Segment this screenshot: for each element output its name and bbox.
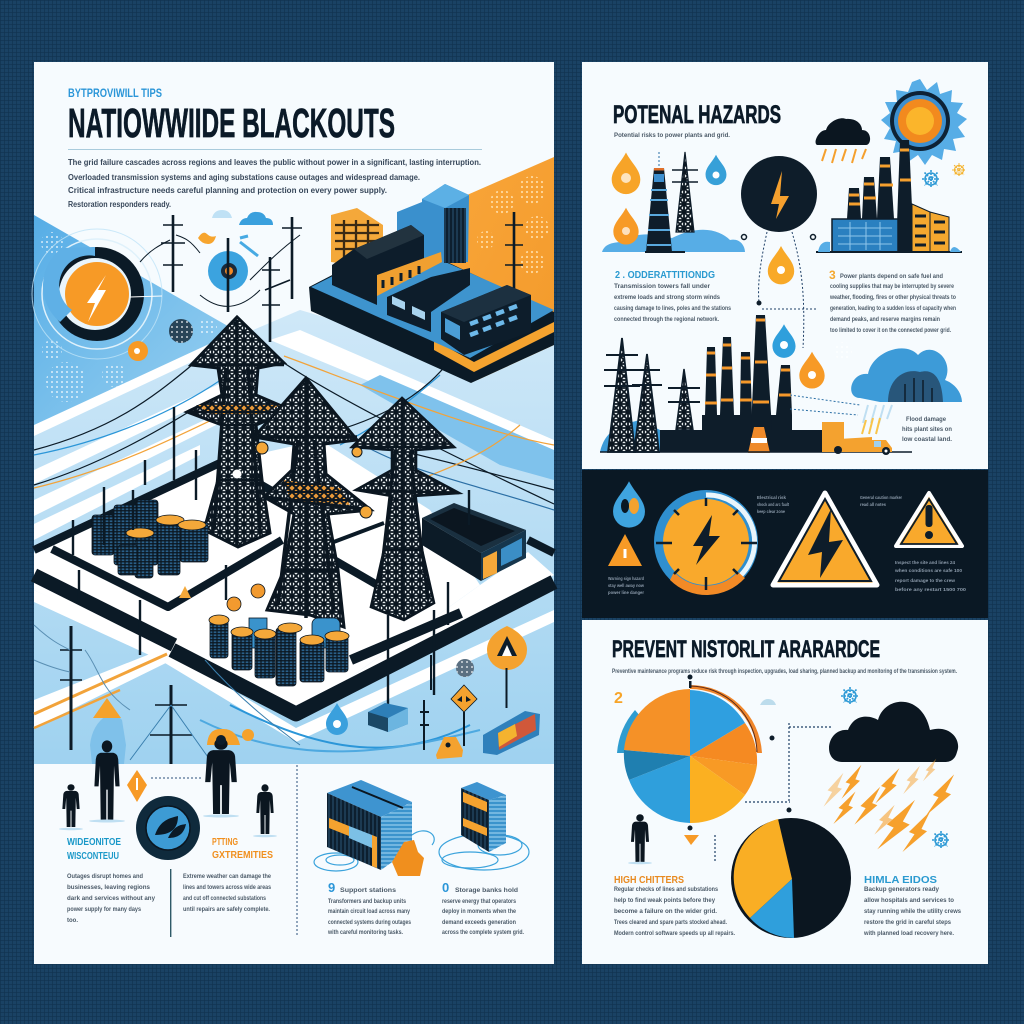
caption left — [67, 837, 155, 924]
warning sign diamond — [451, 685, 477, 746]
list item 3: cooling supplies that may be interrupted by severe — [830, 283, 954, 290]
band captions: General caution marker — [860, 495, 902, 500]
worker helmet right — [203, 729, 254, 818]
heading: PREVENT NISTORLIT ARARARDCE — [612, 636, 880, 663]
caption left: Outages disrupt homes and — [67, 873, 143, 880]
lattice pylon 2 — [254, 378, 372, 627]
notes under servers: demand exceeds generation — [442, 919, 516, 926]
list item 2 — [614, 270, 731, 323]
caption left: power supply for many days — [67, 906, 141, 913]
notes under servers: 9 — [328, 880, 335, 895]
notes under servers: with careful monitoring tasks. — [327, 929, 403, 936]
sun — [881, 79, 967, 165]
list item 3: generation, leading to a sudden loss of capacity when — [830, 305, 956, 312]
lattice pylon 3 — [352, 398, 459, 620]
server cabinets — [314, 780, 529, 876]
transformer cluster 2 — [179, 584, 349, 686]
band captions — [608, 495, 967, 595]
band captions: shock and arc fault — [757, 502, 789, 507]
notes under servers: Transformers and backup units — [328, 898, 406, 905]
small orange warning — [608, 534, 642, 566]
pie chart 1 — [617, 685, 762, 823]
panel: potential hazards — [582, 62, 988, 469]
notes under servers — [327, 880, 524, 936]
storm cloud over building — [851, 348, 962, 434]
dump truck — [822, 422, 892, 455]
right note: HIMLA EIDOS — [864, 875, 937, 886]
caption middle: GXTREMITIES — [212, 850, 273, 861]
right note: with planned load recovery here. — [863, 930, 954, 937]
title: NATIOWWIIDE BLACKOUTS — [68, 100, 395, 146]
band captions: Warning sign hazard — [608, 576, 644, 581]
lightning circle — [741, 156, 817, 232]
ground — [34, 310, 554, 764]
utility poles, upper — [140, 212, 523, 342]
list item 2: extreme loads and strong storm winds — [614, 294, 720, 301]
list item 3: Power plants depend on safe fuel and — [840, 273, 943, 280]
markers — [684, 674, 792, 845]
right note: allow hospitals and services to — [864, 897, 954, 904]
person — [628, 814, 652, 864]
lightning bolts — [822, 757, 958, 858]
white plate — [34, 440, 480, 716]
blue dotted clusters — [41, 232, 217, 402]
caption middle: until repairs are safely complete. — [183, 906, 270, 913]
note bottom right: low coastal land. — [902, 436, 952, 443]
band captions: stay well away now — [608, 583, 644, 588]
transformer cluster 1 — [92, 500, 208, 578]
list item 3: demand peaks, and reserve margins remain — [830, 316, 940, 323]
storm cloud — [829, 702, 958, 762]
left note — [614, 875, 735, 937]
numeral: 2 — [614, 690, 623, 707]
pie chart 2 — [731, 818, 851, 938]
leader lines — [715, 723, 832, 863]
intro text: Overloaded transmission systems and aging substations cause outages and widespread damage. — [68, 172, 420, 182]
workers group — [59, 698, 277, 860]
notes under servers: Support stations — [340, 887, 396, 894]
clock gauge — [654, 490, 758, 595]
band captions: keep clear zone — [757, 509, 785, 514]
factory complex on platform — [309, 184, 554, 383]
snow and minor icons — [760, 687, 950, 849]
band captions: read all notes — [860, 502, 886, 507]
fence poles — [73, 407, 469, 720]
panel: nationwide blackouts — [32, 62, 554, 964]
worker small right — [253, 784, 277, 837]
list item 2: connected through the regional network. — [614, 316, 719, 323]
left note: HIGH CHITTERS — [614, 875, 684, 886]
dark cloud with rain — [816, 118, 870, 163]
worker tall left — [89, 698, 126, 822]
power plant lower — [600, 315, 912, 453]
left note: Regular checks of lines and substations — [614, 886, 718, 893]
caption middle: and cut off connected substations — [183, 895, 266, 902]
emblem circle — [136, 796, 200, 860]
list item 3: weather, flooding, fires or other physical threats to — [829, 294, 956, 301]
intro text — [68, 149, 482, 209]
note bottom right: Flood damage — [906, 416, 946, 423]
list item 2: 2 . ODDERATTITIONDG — [615, 270, 715, 281]
orange backdrop — [440, 157, 554, 385]
notes under servers: connected systems during outages — [328, 919, 411, 926]
notes under servers: 0 — [442, 880, 449, 895]
right note: Backup generators ready — [864, 886, 939, 893]
left note: Modern control software speeds up all repairs. — [614, 930, 735, 937]
lattice pylon 1 — [187, 317, 291, 547]
intro text: Restoration responders ready. — [68, 199, 171, 209]
water drop and equipment — [326, 655, 540, 759]
band captions: power line danger — [608, 590, 644, 595]
band captions: when conditions are safe 100 — [894, 568, 962, 573]
snow icons — [922, 163, 966, 188]
small drops — [772, 324, 852, 389]
lower-left utility poles — [34, 625, 300, 785]
caption left: dark and services without any — [67, 895, 155, 902]
illustration: isometric grid scene — [32, 157, 554, 785]
clouds and signal icon — [198, 210, 273, 291]
kicker: BYTPROVIWILL TIPS — [68, 86, 162, 100]
left note: become a failure on the wider grid. — [614, 908, 717, 915]
notes under servers: Storage banks hold — [455, 887, 518, 894]
cable scribbles — [314, 831, 529, 871]
band captions: Electrical risk — [757, 495, 786, 500]
intro text: The grid failure cascades across regions and leaves the public without power in a significant, lasting interruption. — [68, 157, 481, 167]
intro text: Critical infrastructure needs careful planning and protection on every power supply. — [68, 185, 387, 195]
center orange drop — [756, 246, 794, 306]
note bottom right: hits plant sites on — [902, 426, 952, 433]
caption middle — [170, 837, 273, 937]
band captions: report damage to the crew — [895, 578, 955, 583]
notes under servers: reserve energy that operators — [442, 898, 516, 905]
caption left: WIDEONITOE — [67, 837, 121, 848]
left note: Trees cleared and spare parts stocked ahead. — [614, 919, 727, 926]
roads — [34, 462, 554, 714]
subheading: Potential risks to power plants and grid. — [614, 132, 730, 139]
worker small left — [59, 784, 83, 830]
list item 3 — [829, 268, 956, 334]
notes under servers: across the complete system grid. — [442, 929, 524, 936]
small warning triangle — [896, 493, 962, 546]
right note: restore the grid in careful steps — [864, 919, 951, 926]
list item 3: too limited to cover it on the connected power grid. — [830, 327, 951, 334]
right note — [863, 875, 961, 937]
orange dotted clusters — [477, 176, 549, 274]
connector lines — [759, 232, 817, 348]
band captions: Inspect the site and lines 24 — [895, 560, 955, 565]
caption middle: PTTING — [212, 837, 238, 848]
band captions: before any restart 1500 700 — [895, 587, 967, 592]
notes under servers: maintain circuit load across many — [328, 908, 410, 915]
panel: prevention charts — [582, 620, 988, 964]
panel: warning symbols band — [582, 470, 988, 618]
warning sign round — [487, 626, 527, 708]
list item 2: causing damage to lines, poles and the stations — [614, 305, 731, 312]
right note: stay running while the utility crews — [864, 908, 961, 915]
bottom white area — [34, 764, 554, 964]
blue sky triangle — [34, 215, 240, 430]
caption left: too. — [67, 917, 78, 924]
heading: POTENAL HAZARDS — [613, 101, 781, 129]
notes under servers: deploy in moments when the — [442, 908, 516, 915]
note bottom right — [902, 416, 952, 443]
big warning triangle — [773, 493, 877, 585]
factory right — [816, 140, 962, 252]
wires — [34, 356, 554, 751]
water drop icon — [613, 481, 645, 528]
left note: help to find weak points before they — [614, 897, 715, 904]
caption left: WISCONTEUU — [67, 851, 119, 862]
list item 3: 3 — [829, 268, 836, 282]
tower group upper left — [602, 152, 816, 252]
caption middle: Extreme weather can damage the — [183, 873, 271, 880]
caption left: businesses, leaving regions — [67, 884, 150, 891]
orange marker — [127, 770, 147, 802]
gauge icon: lightning in ring — [32, 229, 193, 361]
caption middle: lines and towers across wide areas — [183, 884, 271, 891]
list item 2: Transmission towers fall under — [614, 283, 710, 290]
substation building — [422, 503, 526, 581]
